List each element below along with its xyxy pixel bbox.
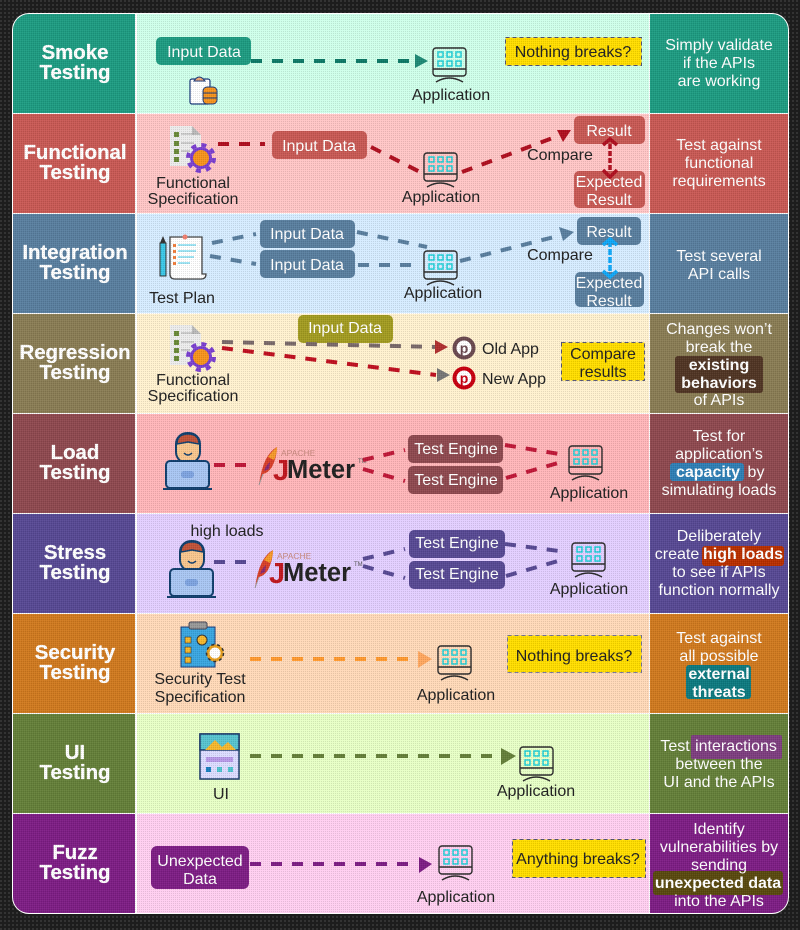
- arrows: plan to inputs: [210, 234, 256, 264]
- box: Input Data: [156, 37, 251, 65]
- description: regression: Changes won’t: [666, 321, 772, 338]
- description: fuzz: [650, 814, 788, 913]
- logo: Apache JMeter: [259, 447, 367, 487]
- label: New App: New App: [482, 371, 546, 388]
- callout: Nothing breaks?: Nothing breaks?: [516, 648, 632, 665]
- label: Security Test Specification: Specification: [155, 689, 245, 706]
- box: Expected Result: Expected: [576, 275, 642, 292]
- description: security: all possible: [679, 648, 759, 665]
- arrow: application to result: [460, 227, 574, 261]
- box: Unexpected Data: Data: [183, 871, 217, 888]
- description: load: [650, 414, 788, 513]
- heading: Fuzz Testing: Testing: [40, 862, 110, 884]
- box: Test Engine 2: Test Engine: [414, 472, 498, 489]
- description: stress: high loads: [703, 546, 783, 563]
- box: Expected Result: [574, 171, 645, 209]
- heading: Regression Testing: Regression: [19, 342, 131, 364]
- label: UI: UI: [213, 786, 229, 803]
- label: Functional Specification: [148, 175, 238, 208]
- icon: user interface: [200, 734, 239, 779]
- label: Functional Specification: Functional: [156, 175, 230, 192]
- arrow: input to application: [251, 54, 428, 68]
- label: Application: Application: [417, 889, 495, 906]
- row: fuzz testing: [13, 814, 788, 913]
- box: Result: [577, 217, 641, 245]
- label: Application: Application: [417, 687, 495, 704]
- box: Test Engine 1: Test Engine: [415, 535, 499, 552]
- logo: Apache JMeter: TM: [354, 562, 363, 568]
- description: regression: behaviors: [681, 375, 757, 392]
- heading: Smoke Testing: [13, 14, 135, 113]
- box: Input Data: Input Data: [282, 138, 356, 155]
- row: ui testing: [13, 714, 788, 813]
- label: high loads: high loads: [191, 523, 263, 540]
- row: stress testing: [13, 514, 788, 613]
- logo: Apache JMeter: J: [269, 558, 285, 590]
- icon: functional specification: [170, 126, 214, 171]
- icon: person with laptop: [167, 541, 216, 597]
- icon: application: [424, 153, 457, 187]
- description: regression: existing: [689, 357, 749, 374]
- heading: Load Testing: Load: [51, 442, 99, 464]
- box: Input Data: Input Data: [167, 44, 241, 61]
- box: Expected Result: Result: [586, 293, 632, 310]
- icon: application: [520, 747, 553, 781]
- box: Test Engine 1: [408, 435, 503, 463]
- callout: Anything breaks?: Anything breaks?: [516, 851, 640, 868]
- arrows: engines to application: [505, 445, 559, 478]
- description: load: Test for: [693, 428, 746, 445]
- heading: Integration Testing: [13, 214, 135, 313]
- icon: application: [572, 543, 605, 577]
- row: integration testing: [13, 214, 788, 313]
- heading: Smoke Testing: Smoke: [42, 42, 108, 64]
- icon: functional specification: [170, 325, 214, 370]
- description: load: by: [748, 464, 764, 481]
- description: functional: Test against: [676, 137, 762, 154]
- callout: Compare results: Compare: [570, 346, 636, 363]
- arrows: jmeter to engines: [363, 450, 405, 481]
- description: smoke: [650, 14, 788, 113]
- description: fuzz: vulnerabilities by: [660, 839, 778, 856]
- arrow: spec to new app: [222, 348, 450, 382]
- box: Input Data 1: [260, 220, 355, 248]
- description: integration: Test several: [676, 248, 762, 265]
- arrow: spec to input: [218, 142, 265, 146]
- arrow: ui to application: [250, 748, 516, 765]
- icon: application: [438, 646, 471, 680]
- arrows: engines to application: [505, 544, 559, 576]
- heading: Stress Testing: [13, 514, 135, 613]
- box: Result: Result: [586, 123, 632, 140]
- description: ui: Test: [660, 738, 690, 755]
- icon: application: [424, 251, 457, 285]
- description: ui: interactions: [695, 738, 777, 755]
- description: stress: function normally: [659, 582, 779, 599]
- description: fuzz: Identify: [693, 821, 745, 838]
- description: ui: [650, 714, 788, 813]
- heading: Stress Testing: Stress: [44, 542, 106, 564]
- description: fuzz: sending: [691, 857, 747, 874]
- panel: load flow: [137, 414, 649, 513]
- description: regression: break the: [686, 339, 752, 356]
- label: Functional Specification: Functional: [156, 372, 230, 389]
- description: functional: [650, 114, 788, 213]
- description: security: threats: [692, 684, 746, 701]
- box: Input Data: [298, 315, 393, 343]
- panel: smoke flow: [137, 14, 649, 113]
- arrow: spec to application: [250, 651, 432, 668]
- callout: Nothing breaks?: [506, 38, 642, 66]
- heading: Functional Testing: Testing: [40, 162, 110, 184]
- icon: test plan: [160, 234, 206, 279]
- description: ui: between the: [675, 756, 763, 773]
- heading: Security Testing: Testing: [40, 662, 110, 684]
- panel: fuzz flow: [137, 814, 649, 913]
- box: Test Engine 1: Test Engine: [414, 441, 498, 458]
- description: security: [650, 614, 788, 713]
- logo: Apache JMeter: TM: [358, 459, 367, 465]
- icon: person with laptop: [163, 433, 212, 489]
- heading: Regression Testing: Testing: [40, 362, 110, 384]
- heading: Smoke Testing: Testing: [40, 62, 110, 84]
- panel: regression flow: [137, 314, 649, 413]
- description: load: application’s: [675, 446, 763, 463]
- description: regression: of APIs: [694, 392, 744, 409]
- box: Input Data: Input Data: [308, 320, 382, 337]
- heading: Stress Testing: Testing: [40, 562, 110, 584]
- label: Application: Application: [412, 87, 490, 104]
- label: Functional Specification: [148, 372, 238, 405]
- label: Application: Application: [402, 189, 480, 206]
- icon: new app: [454, 368, 474, 388]
- box: Expected Result: [575, 272, 644, 310]
- box: Input Data 1: Input Data: [270, 226, 344, 243]
- panel: stress flow: [137, 514, 649, 613]
- description: functional: functional: [685, 155, 753, 172]
- row: smoke testing: [13, 14, 788, 113]
- arrows: inputs to application: [357, 232, 427, 265]
- label: Old App: Old App: [482, 341, 539, 358]
- description: smoke: Simply validate: [665, 37, 773, 54]
- heading: Load Testing: [13, 414, 135, 513]
- box: Expected Result: Expected: [576, 174, 642, 191]
- arrow: compare double: [603, 239, 617, 277]
- description: load: simulating loads: [662, 482, 776, 499]
- icon: application: [433, 48, 466, 82]
- logo: Apache JMeter: J: [273, 455, 289, 487]
- icon: old app: p: [460, 340, 468, 356]
- heading: UI Testing: UI: [65, 742, 85, 764]
- heading: Regression Testing: [13, 314, 135, 413]
- callout: Anything breaks?: [512, 840, 646, 878]
- box: Test Engine 1: [409, 530, 505, 558]
- row: functional testing: [13, 114, 788, 213]
- heading: Security Testing: [13, 614, 135, 713]
- callout: Nothing breaks?: Nothing breaks?: [515, 44, 631, 61]
- description: smoke: are working: [678, 73, 760, 90]
- row: load testing: [13, 414, 788, 513]
- label: Application: Application: [497, 783, 575, 800]
- box: Expected Result: Result: [586, 192, 632, 209]
- logo: Apache JMeter: APACHE: [277, 551, 312, 561]
- label: Compare: Compare: [527, 247, 593, 264]
- logo: Apache JMeter: APACHE: [281, 448, 316, 458]
- logo: Apache JMeter: Meter: [287, 456, 355, 484]
- arrow: input to application: [371, 147, 420, 172]
- label: Functional Specification: Specification: [148, 388, 238, 405]
- arrow: application to result: [462, 130, 571, 172]
- arrow: person to jmeter: [214, 560, 248, 564]
- box: Input Data 2: [260, 250, 355, 278]
- box: Input Data 2: Input Data: [270, 257, 344, 274]
- row: regression testing: [13, 314, 788, 413]
- heading: Integration Testing: Testing: [40, 262, 110, 284]
- heading: Fuzz Testing: [13, 814, 135, 913]
- heading: UI Testing: Testing: [40, 762, 110, 784]
- label: Application: Application: [550, 581, 628, 598]
- heading: UI Testing: [13, 714, 135, 813]
- logo: Apache JMeter: Meter: [283, 559, 351, 587]
- description: ui: UI and the APIs: [663, 774, 775, 791]
- panel: functional flow: [137, 114, 649, 213]
- description: fuzz: into the APIs: [674, 893, 764, 910]
- label: Application: Application: [404, 285, 482, 302]
- panel: integration flow: [137, 214, 649, 313]
- description: stress: Deliberately: [677, 528, 761, 545]
- arrow: person to jmeter: [214, 463, 248, 467]
- description: integration: API calls: [688, 266, 750, 283]
- description: security: Test against: [676, 630, 762, 647]
- icon: application: [439, 846, 472, 880]
- box: Result: [574, 116, 645, 144]
- icon: application: [569, 446, 602, 480]
- arrow: spec to old app: [222, 340, 448, 354]
- panel: security flow: [137, 614, 649, 713]
- logo: Apache JMeter: [255, 550, 363, 590]
- label: Functional Specification: Specification: [148, 191, 238, 208]
- heading: Load Testing: Testing: [40, 462, 110, 484]
- row: security testing: [13, 614, 788, 713]
- arrow: data to application: [250, 857, 432, 873]
- heading: Security Testing: Security: [35, 642, 116, 664]
- heading: Fuzz Testing: Fuzz: [52, 842, 98, 864]
- icon: clipboard and database: [190, 77, 217, 104]
- icon: old app: [454, 338, 474, 358]
- heading: Integration Testing: Integration: [22, 242, 128, 264]
- label: Security Test Specification: [154, 671, 246, 706]
- description: functional: requirements: [672, 173, 766, 190]
- box: Test Engine 2: [409, 561, 505, 589]
- arrow: compare double: [603, 139, 617, 177]
- label: Compare: Compare: [527, 147, 593, 164]
- box: Result: Result: [586, 224, 632, 241]
- description: regression: [650, 314, 788, 413]
- box: Test Engine 2: [408, 466, 503, 494]
- description: stress: to see if APIs: [672, 564, 766, 581]
- description: fuzz: unexpected data: [655, 875, 781, 892]
- heading: Functional Testing: Functional: [23, 142, 127, 164]
- callout: Compare results: [562, 342, 644, 381]
- description: load: capacity: [676, 464, 740, 481]
- label: Test Plan: Test Plan: [149, 290, 215, 307]
- description: stress: [650, 514, 788, 613]
- icon: security test specification: [181, 622, 224, 667]
- callout: Compare results: results: [579, 364, 627, 381]
- label: Application: Application: [550, 485, 628, 502]
- icon: new app: p: [460, 370, 468, 386]
- description: smoke: if the APIs: [683, 55, 755, 72]
- heading: Functional Testing: [13, 114, 135, 213]
- box: Unexpected Data: Unexpected: [157, 853, 243, 870]
- description: security: external: [688, 666, 750, 683]
- box: Unexpected Data: [151, 846, 249, 889]
- description: stress: create: [655, 546, 699, 563]
- box: Test Engine 2: Test Engine: [415, 566, 499, 583]
- description: integration: [650, 214, 788, 313]
- callout: Nothing breaks?: [508, 636, 642, 672]
- label: Security Test Specification: Security Test: [154, 671, 246, 688]
- arrows: jmeter to engines: [363, 549, 405, 578]
- panel: ui flow: [137, 714, 649, 813]
- box: Input Data: [272, 131, 367, 159]
